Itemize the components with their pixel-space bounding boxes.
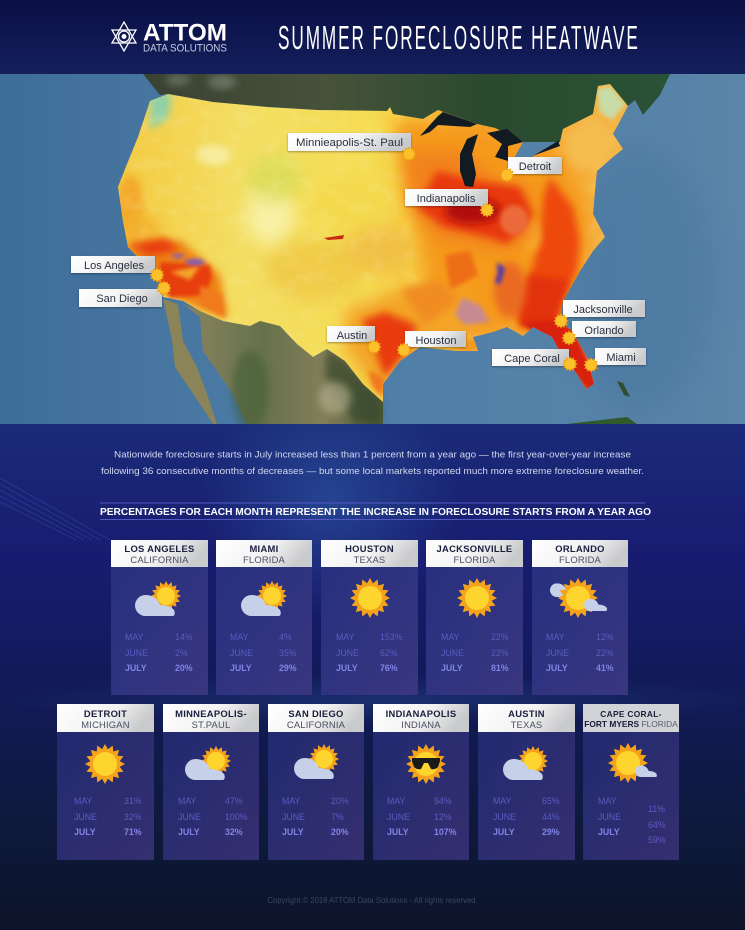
- card: Minneapolis-St. Paul: [163, 704, 259, 860]
- card: Austin: 65%: [542, 796, 560, 806]
- card: Cape Coral-Fort Myers: [583, 704, 679, 860]
- card: Cape Coral-Fort Myers: 59%: [648, 835, 666, 845]
- card: Los Angeles: 20%: [175, 663, 193, 673]
- map marker: Orlando: [561, 321, 636, 346]
- card: Jacksonville: 22%: [491, 632, 509, 642]
- card: Jacksonville: FLORIDA: [453, 554, 496, 565]
- card: Houston: 62%: [380, 648, 398, 658]
- card: Indianapolis: [373, 704, 469, 860]
- card: Miami: FLORIDA: [243, 554, 286, 565]
- map marker: Indianapolis: [405, 189, 495, 218]
- card: Jacksonville: 81%: [491, 663, 509, 673]
- card: Houston: 153%: [380, 632, 403, 642]
- section heading: PERCENTAGES FOR EACH MONTH REPRESENT THE INCREASE IN FORECLOSURE STARTS FROM A YEAR AGO: [100, 506, 651, 518]
- map marker: Austin: Austin: [337, 330, 367, 342]
- icon: partly cloudy: [241, 581, 287, 616]
- card: Los Angeles: JULY: [125, 663, 147, 673]
- card: Minneapolis-St. Paul: ST.PAUL: [192, 719, 230, 730]
- card: Miami: MIAMI: [249, 543, 279, 554]
- card: Minneapolis-St. Paul: MINNEAPOLIS-: [175, 708, 247, 719]
- card: Jacksonville: JACKSONVILLE: [436, 543, 513, 554]
- map marker: Cape Coral: Cape Coral: [504, 353, 560, 365]
- card: Austin: 29%: [542, 827, 560, 837]
- card: Austin: AUSTIN: [508, 708, 545, 719]
- card: San Diego: [268, 704, 364, 860]
- icon: hexagram logo mark: [112, 22, 136, 51]
- card: Detroit: MAY: [74, 796, 93, 806]
- card: Austin: 44%: [542, 812, 560, 822]
- card: Houston: JUNE: [336, 648, 359, 658]
- card: San Diego: JULY: [282, 827, 304, 837]
- card: Houston: HOUSTON: [345, 543, 394, 554]
- icon: partly cloudy: [135, 581, 181, 616]
- card: Orlando: JUNE: [546, 648, 569, 658]
- map marker: Los Angeles: [71, 256, 165, 283]
- card: Miami: 29%: [279, 663, 297, 673]
- map marker: Detroit: Detroit: [519, 161, 551, 173]
- card: Orlando: JULY: [546, 663, 568, 673]
- Cuba: [567, 417, 637, 424]
- Northeast pale: [565, 115, 620, 170]
- icon: partly cloudy: [503, 746, 548, 780]
- card: Orlando: 22%: [596, 648, 614, 658]
- card: Los Angeles: MAY: [125, 632, 144, 642]
- header band: [112, 19, 638, 57]
- Kansas hotspot: [324, 235, 344, 240]
- map marker: Houston: Houston: [416, 335, 456, 347]
- card: Houston: MAY: [336, 632, 355, 642]
- card: Houston: 76%: [380, 663, 398, 673]
- card: San Diego: SAN DIEGO: [288, 708, 344, 719]
- card: San Diego: 7%: [331, 812, 344, 822]
- map marker: Minneapolis-St. Paul: Minnieapolis-St. Paul: [296, 137, 403, 149]
- card: Minneapolis-St. Paul: 32%: [225, 827, 243, 837]
- card: Miami: 35%: [279, 648, 297, 658]
- map marker: Los Angeles: Los Angeles: [84, 260, 144, 272]
- card: Jacksonville: 22%: [491, 648, 509, 658]
- map marker: Houston: [396, 331, 466, 358]
- Texas orange and red: [345, 290, 470, 395]
- Bahamas: [617, 381, 630, 397]
- map marker: Austin: [327, 326, 382, 355]
- card: Austin: [478, 704, 575, 860]
- card: Austin: JULY: [493, 827, 515, 837]
- map marker: Cape Coral: [492, 349, 578, 372]
- card: Cape Coral-Fort Myers: JUNE: [598, 812, 621, 822]
- card: Orlando: FLORIDA: [559, 554, 602, 565]
- card: Jacksonville: MAY: [441, 632, 460, 642]
- card: Minneapolis-St. Paul: JUNE: [178, 812, 201, 822]
- card: Miami: MAY: [230, 632, 249, 642]
- icon: sun with sunglasses: [406, 744, 446, 784]
- Midwest red: [405, 150, 535, 250]
- card: Cape Coral-Fort Myers: MAY: [598, 796, 617, 806]
- card: Indianapolis: 94%: [434, 796, 452, 806]
- card: San Diego: CALIFORNIA: [287, 719, 346, 730]
- card: Houston: TEXAS: [354, 554, 385, 565]
- card: Indianapolis: JULY: [387, 827, 409, 837]
- card: Jacksonville: [426, 540, 523, 695]
- card: Miami: JULY: [230, 663, 252, 673]
- card: Orlando: 41%: [596, 663, 614, 673]
- orange Gulf coast: [456, 340, 480, 350]
- card: Los Angeles: [111, 540, 208, 695]
- SW orange and red: [125, 240, 228, 318]
- Baja California: [163, 299, 217, 424]
- card: Minneapolis-St. Paul: 100%: [225, 812, 248, 822]
- card: Orlando: MAY: [546, 632, 565, 642]
- map marker: Jacksonville: Jacksonville: [573, 304, 633, 316]
- card: Indianapolis: 107%: [434, 827, 457, 837]
- card: Los Angeles: LOS ANGELES: [124, 543, 195, 554]
- map marker: Miami: [583, 348, 646, 373]
- card: Cape Coral-Fort Myers: CAPE CORAL-: [600, 709, 662, 719]
- card: Austin: MAY: [493, 796, 512, 806]
- card: Minneapolis-St. Paul: 47%: [225, 796, 243, 806]
- Southeast red strip: [515, 177, 580, 327]
- card: Detroit: 31%: [124, 796, 142, 806]
- Great Lakes: [420, 112, 560, 187]
- USA heat layers: [110, 80, 640, 410]
- card: Austin: JUNE: [493, 812, 516, 822]
- card: Cape Coral-Fort Myers: JULY: [598, 827, 620, 837]
- Appalachian and coast orange: [494, 262, 526, 318]
- icon: partly cloudy: [294, 744, 339, 779]
- card: Indianapolis: INDIANA: [401, 719, 441, 730]
- map marker: Jacksonville: [553, 300, 645, 329]
- card: Los Angeles: 2%: [175, 648, 188, 658]
- Canada landmass: [143, 74, 670, 142]
- mottled texture: [120, 86, 624, 398]
- card: Cape Coral-Fort Myers: 64%: [648, 820, 666, 830]
- map marker: Detroit: [499, 157, 562, 183]
- intro text: Nationwide foreclosure starts in July increased less than 1 percent from a year ago — the first year-over-year increase: [114, 450, 631, 460]
- icon: sun: [457, 578, 497, 618]
- map marker: San Diego: [79, 280, 172, 307]
- logo: ATTOM Data Solutions: [112, 20, 227, 54]
- card: Detroit: JUNE: [74, 812, 97, 822]
- card: Austin: TEXAS: [511, 719, 542, 730]
- card: Los Angeles: JUNE: [125, 648, 148, 658]
- card: Detroit: JULY: [74, 827, 96, 837]
- icon: sun with small cloud: [608, 743, 657, 783]
- Mexico landmass: [183, 304, 383, 424]
- panel: heat map of the United States: [0, 74, 745, 430]
- Canada snow patches: [166, 75, 236, 89]
- card: Detroit: 32%: [124, 812, 142, 822]
- NW coast cool tint: [150, 90, 172, 130]
- card: Houston: JULY: [336, 663, 358, 673]
- Florida red: [520, 316, 594, 389]
- intro text: [101, 450, 644, 477]
- Louisiana and Mississippi pink: [455, 298, 490, 325]
- icon: partly cloudy: [185, 746, 231, 780]
- Eastern orange body: [395, 120, 590, 330]
- card: Cape Coral-Fort Myers: FORT MYERS FLORIDA: [584, 719, 678, 729]
- map marker: Indianapolis: Indianapolis: [417, 193, 476, 205]
- footer copyright: Copyright © 2018 ATTOM Data Solutions - All rights reserved.: [268, 896, 478, 905]
- icon: sun: [85, 744, 125, 784]
- card: Houston: [321, 540, 418, 695]
- card: Cape Coral-Fort Myers: 11%: [648, 804, 665, 814]
- icon: sun with clouds: [550, 578, 607, 618]
- card: Orlando: [532, 540, 628, 695]
- card: Los Angeles: CALIFORNIA: [130, 554, 189, 565]
- card: Detroit: DETROIT: [84, 708, 127, 719]
- card: Indianapolis: JUNE: [387, 812, 410, 822]
- map marker: San Diego: San Diego: [96, 293, 148, 305]
- purple patch: [495, 262, 505, 285]
- map marker: Miami: Miami: [606, 352, 636, 364]
- purple desert patches: [172, 254, 205, 265]
- card: Indianapolis: INDIANAPOLIS: [386, 708, 456, 719]
- card: Miami: JUNE: [230, 648, 253, 658]
- card: Miami: 4%: [279, 632, 292, 642]
- card: Orlando: 12%: [596, 632, 614, 642]
- intro text: following 36 consecutive months of decreases — but some local markets reported much more extreme foreclosure weather.: [101, 466, 644, 477]
- logo wordmark: ATTOM: [143, 20, 227, 46]
- card: Miami: [216, 540, 312, 695]
- logo subtitle: DATA SOLUTIONS: [143, 42, 227, 54]
- card: San Diego: MAY: [282, 796, 301, 806]
- card: Jacksonville: JUNE: [441, 648, 464, 658]
- card: Jacksonville: JULY: [441, 663, 463, 673]
- card: Minneapolis-St. Paul: JULY: [178, 827, 200, 837]
- card: Detroit: [57, 704, 154, 860]
- card: San Diego: JUNE: [282, 812, 305, 822]
- card: Indianapolis: 12%: [434, 812, 452, 822]
- card: San Diego: 20%: [331, 827, 349, 837]
- title: SUMMER FORECLOSURE HEATWAVE: [278, 19, 638, 57]
- card: Detroit: 71%: [124, 827, 142, 837]
- map marker: Orlando: Orlando: [584, 325, 624, 337]
- card: Indianapolis: MAY: [387, 796, 406, 806]
- card: Orlando: ORLANDO: [555, 543, 605, 554]
- card: Los Angeles: 14%: [175, 632, 193, 642]
- map marker: Minneapolis-St. Paul: [288, 133, 417, 162]
- card: Detroit: MICHIGAN: [81, 719, 130, 730]
- card: Minneapolis-St. Paul: MAY: [178, 796, 197, 806]
- card: San Diego: 20%: [331, 796, 349, 806]
- Ozarks orange: [445, 250, 478, 290]
- icon: sun: [350, 578, 390, 618]
